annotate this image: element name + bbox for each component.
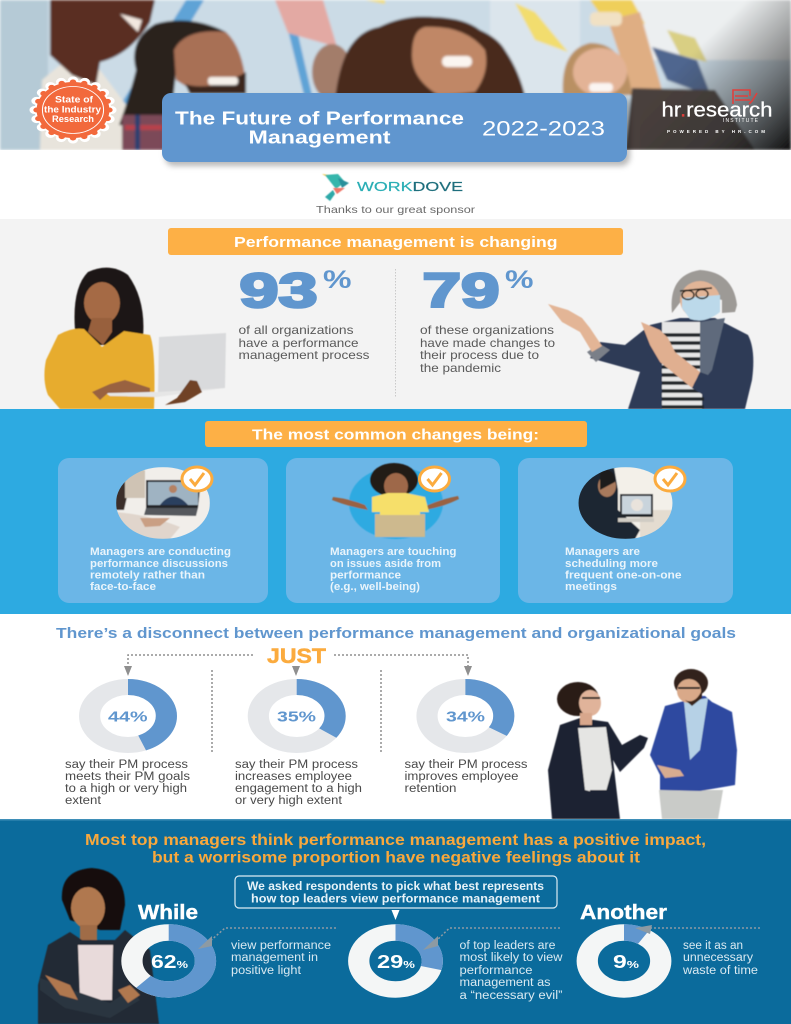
stat: 79%: their process due to — [420, 348, 539, 362]
title banner: Management — [248, 126, 390, 148]
title banner: 2022-2023 — [482, 118, 605, 140]
heading: but a worrisome proportion have negative feelings about it — [152, 850, 640, 866]
panel: disconnect between PM and organizational goals — [0, 614, 791, 819]
title banner: The Future of Performance — [175, 108, 464, 128]
card: issues aside from performance: Managers are touching — [330, 546, 456, 558]
icon: video call photo — [116, 467, 210, 539]
text: 44% label — [65, 759, 190, 807]
donut chart: 9% — [587, 932, 661, 990]
stat: 93%: management process — [238, 348, 370, 362]
text: 29% label: management as — [460, 977, 551, 989]
stat: 79% — [420, 265, 555, 375]
badge: State of the Industry Research: Research — [52, 114, 94, 125]
stat: 93% — [238, 265, 370, 362]
sponsor: Workdove logo — [316, 174, 476, 216]
text: 29% label: most likely to view — [460, 952, 563, 964]
callout: survey question: how top leaders view performance management — [251, 894, 540, 906]
text: 35% label: increases employee — [235, 771, 352, 783]
text: 9% label: unnecessary — [683, 952, 753, 964]
text: 29% label: a “necessary evil” — [460, 990, 563, 1002]
figure: businesswoman with crossed arms — [38, 868, 159, 1024]
card: remote discussions: performance discussions — [90, 558, 228, 570]
stat: 79%: of these organizations — [420, 323, 554, 337]
stat: 79%: the pandemic — [420, 361, 501, 375]
text: 34% label: say their PM process — [404, 759, 528, 771]
donut chart: 62% — [132, 932, 205, 990]
stat: 93%: have a performance — [238, 336, 359, 350]
logo: hr research institute: hr.research — [662, 100, 772, 122]
text: 44% label: extent — [65, 795, 102, 807]
text: 62% label — [231, 940, 331, 977]
stat: 79%: % — [505, 266, 534, 294]
card: issues aside from performance: on issues aside from — [330, 558, 441, 570]
donut chart: 62%: 62 % — [151, 952, 188, 972]
title banner — [162, 93, 627, 162]
badge: State of the Industry Research: State of — [55, 94, 94, 106]
text: 34% label — [404, 759, 528, 795]
figure: woman with laptop — [44, 268, 226, 409]
heading bar — [168, 228, 623, 255]
stat: 93%: % — [323, 266, 352, 294]
label: JUST: JUST — [267, 645, 326, 668]
card: issues aside from performance — [286, 458, 500, 603]
sponsor: Workdove logo: Thanks to our great sponsor — [316, 204, 476, 216]
arrows from JUST to donuts — [124, 655, 472, 676]
text: 62% label: management in — [231, 952, 318, 964]
text: 9% label — [682, 940, 758, 977]
leader arrow: 9% — [635, 925, 760, 934]
badge: State of the Industry Research: the Industry — [44, 104, 102, 116]
panel: top managers' feelings — [0, 819, 791, 1024]
panel: performance management is changing — [0, 219, 791, 409]
leader arrow: 62% — [198, 928, 336, 949]
figure: masked man pointing — [548, 270, 753, 409]
card: remote discussions: face-to-face — [90, 581, 156, 593]
donut chart: 35%: 35% — [277, 708, 316, 726]
text: 34% label: improves employee — [404, 771, 518, 783]
logo: hr research institute: INSTITUTE — [723, 118, 759, 124]
text: 29% label — [460, 940, 563, 1002]
icon: check badge — [655, 467, 685, 491]
heading: Another: Another — [580, 902, 667, 924]
panel: most common changes — [0, 409, 791, 614]
card: remote discussions: Managers are conducting — [90, 546, 231, 558]
text: 44% label: meets their PM goals — [65, 771, 190, 783]
card: remote discussions — [58, 458, 268, 603]
text: 35% label: say their PM process — [235, 759, 358, 771]
heading bar — [205, 421, 587, 447]
leader arrow: 29% — [423, 928, 560, 950]
callout: survey question — [235, 876, 557, 920]
callout: survey question: We asked respondents to pick what best represents — [247, 881, 544, 893]
text: 9% label: see it as an — [683, 940, 743, 952]
card: one-on-one meetings: frequent one-on-one — [565, 570, 682, 582]
icon: check badge — [182, 467, 212, 491]
text: 35% label: engagement to a high — [235, 783, 362, 795]
heading — [85, 832, 706, 866]
text: 35% label: or very high extent — [235, 795, 343, 807]
donut chart: 29% — [359, 932, 432, 990]
text: 44% label: say their PM process — [65, 759, 188, 771]
text: 29% label: of top leaders are — [460, 940, 556, 952]
heading: Most top managers think performance management has a positive impact, — [85, 832, 706, 849]
logo: hr research institute — [662, 90, 772, 134]
figure: two colleagues talking — [548, 669, 737, 819]
logo: hr research institute: POWERED BY HR.COM — [667, 129, 765, 134]
donut chart: 44% — [90, 687, 166, 745]
badge: State of the Industry Research — [35, 80, 111, 140]
stat: 79%: have made changes to — [420, 336, 555, 350]
text: 29% label: performance — [460, 965, 532, 977]
text: 34% label: retention — [404, 783, 456, 795]
card: one-on-one meetings: Managers are — [565, 546, 640, 558]
heading: While: While — [138, 902, 198, 924]
icon: check badge — [420, 467, 450, 491]
card: one-on-one meetings — [518, 458, 733, 603]
text: 62% label: positive light — [231, 965, 302, 977]
text: 9% label: waste of time — [682, 965, 758, 977]
heading bar: The most common changes being: — [252, 426, 539, 444]
text: 44% label: to a high or very high — [65, 783, 187, 795]
donut chart: 44%: 44% — [108, 708, 148, 726]
donut chart: 35% — [258, 687, 335, 745]
stat: 79%: 79 — [422, 265, 500, 318]
stat: 93%: of all organizations — [238, 323, 354, 337]
card: one-on-one meetings: scheduling more — [565, 558, 658, 570]
card: issues aside from performance: (e.g., well-being) — [330, 581, 420, 593]
card: one-on-one meetings: meetings — [565, 581, 617, 593]
text: 35% label — [235, 759, 362, 807]
stat: 93%: 93 — [240, 265, 318, 318]
icon: woman on video call photo — [578, 467, 673, 539]
card: issues aside from performance: performance — [330, 570, 401, 582]
header photo: team looking up at sticky notes — [0, 0, 791, 150]
donut chart: 34% — [427, 687, 504, 745]
donut chart: 9%: 9 % — [613, 952, 639, 972]
donut chart: 29%: 29 % — [377, 952, 415, 972]
heading bar: Performance management is changing — [234, 234, 558, 251]
sponsor: Workdove logo: WORK DOVE — [357, 179, 463, 194]
donut chart: 34%: 34% — [446, 708, 485, 726]
heading: There’s a disconnect between performance management and organizational goals — [56, 625, 736, 642]
text: 62% label: view performance — [231, 940, 331, 952]
icon: woman meditating at laptop — [332, 463, 459, 539]
card: remote discussions: remotely rather than — [90, 570, 205, 582]
